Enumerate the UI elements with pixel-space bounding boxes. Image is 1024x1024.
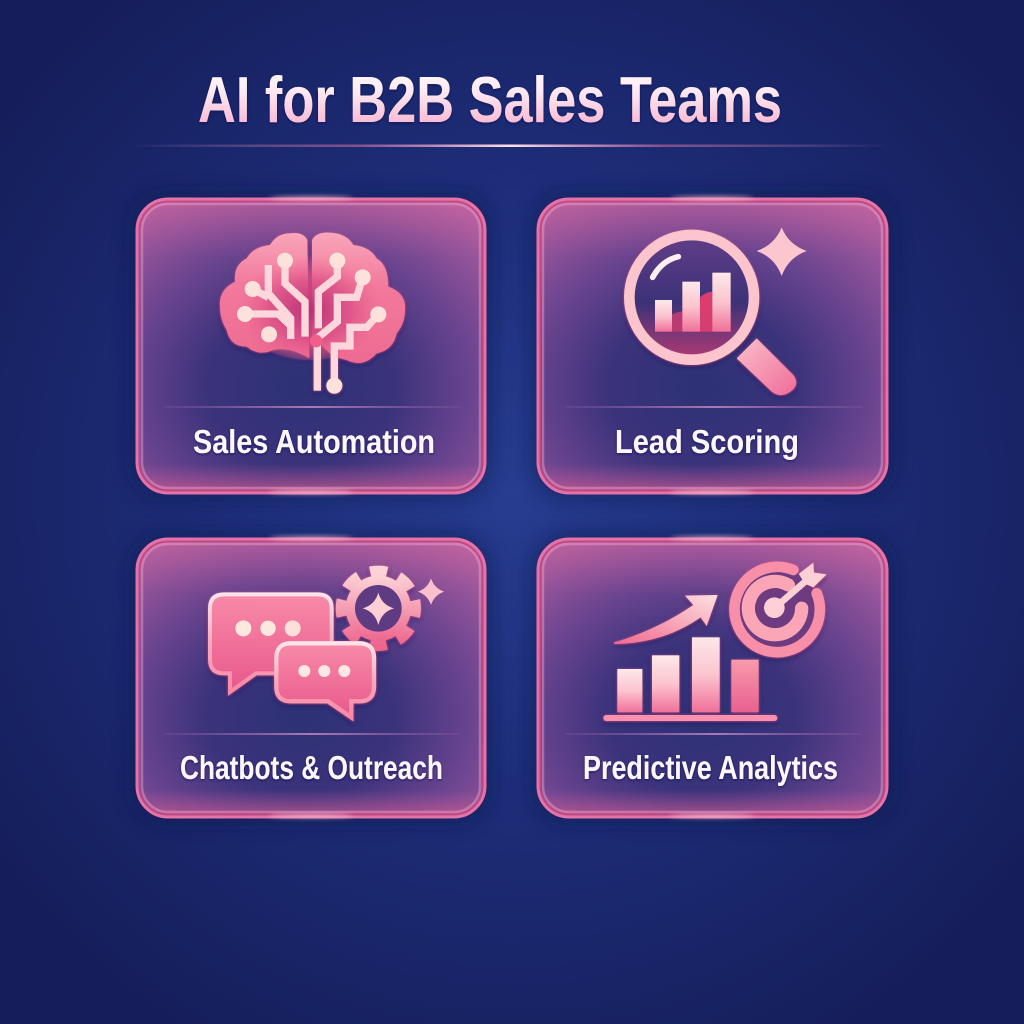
panel: lead scoring (533, 194, 892, 498)
icon: growth chart and target (603, 563, 827, 721)
title: AI for B2B Sales Teams (198, 63, 782, 136)
icon: small sparkle (418, 578, 444, 605)
gear (342, 572, 415, 645)
growth arrow (613, 595, 718, 644)
bars (603, 637, 777, 721)
card frame (533, 194, 892, 498)
label: sales automation: Sales Automation (193, 423, 435, 460)
large speech bubble (210, 594, 332, 692)
icon: chat bubbles and gear (210, 572, 415, 717)
label: lead scoring: Lead Scoring (615, 423, 799, 460)
label: chatbots and outreach: Chatbots & Outreach (180, 749, 443, 786)
small speech bubble (276, 643, 374, 717)
icon: brain with circuits (220, 233, 405, 394)
icon: magnifier over bar chart (629, 235, 796, 395)
card frame (132, 194, 490, 498)
card frame (533, 534, 892, 822)
panel: predictive analytics (533, 534, 892, 822)
panel: chatbots and outreach (132, 534, 490, 822)
panel: sales automation (132, 194, 490, 498)
label: predictive analytics: Predictive Analytics (583, 749, 838, 786)
icon: sparkle (757, 227, 807, 276)
target (732, 563, 827, 652)
card frame (132, 534, 490, 822)
